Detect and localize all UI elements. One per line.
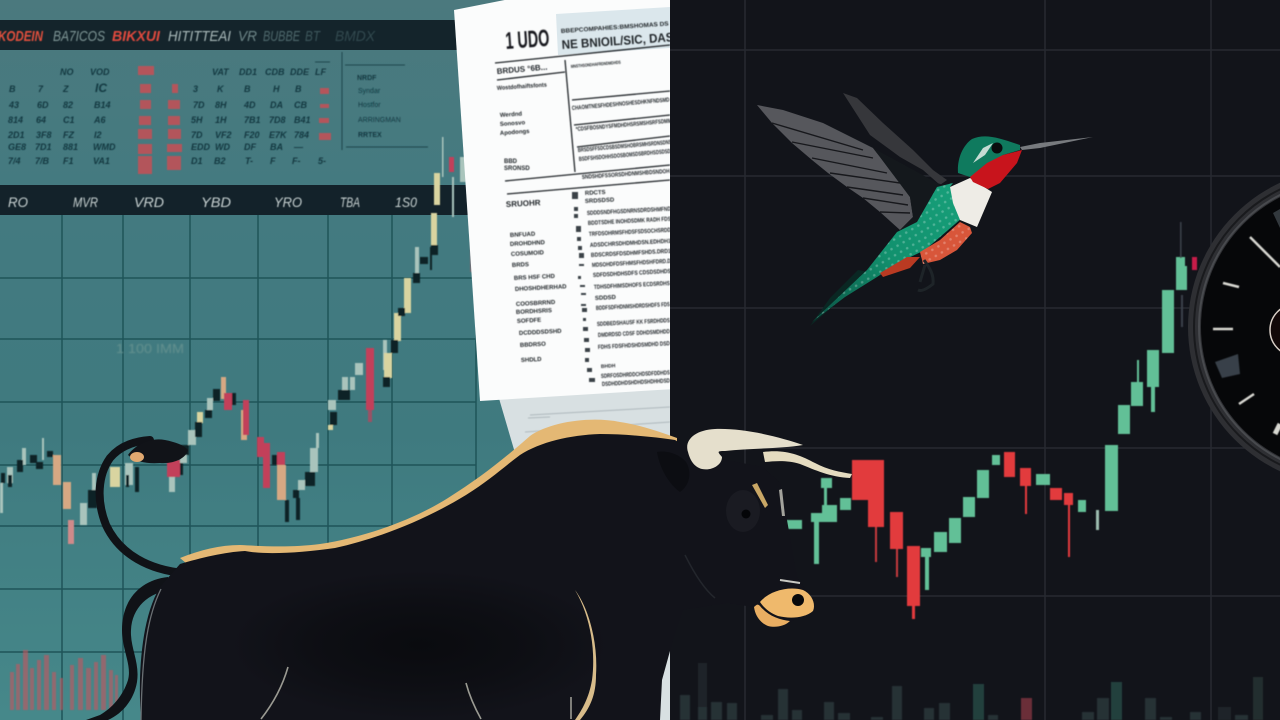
document fine print: BDSCRDSFDSDHMFSHDS.DRD1 [591,249,672,259]
document fine print: SDFDSDHDHSDFS CDSDSDHDS [593,269,671,279]
document fine print: BRDS [512,262,529,269]
document fine print: TDHSDFHIMSDHOFS ECDSRDHS [594,281,670,291]
document fine print: Wostdofhaiftsfonts [497,82,548,92]
hummingbird body [812,183,962,322]
data table: E7K [269,130,288,140]
document fine print: BNFUAD [510,232,536,239]
bull horn right [763,451,852,478]
faint chart label: 1 100 IMM [116,341,184,356]
data table: DDE [290,67,310,77]
table legend: ARRINGMAN [358,117,401,124]
document fine print: SDDBEDSHAUSF KK FSRDHDDS [597,318,670,328]
hummingbird back wing [843,93,947,185]
document fine print: MNSTHSONDHAFRDNDMDHDS [571,60,621,69]
top header band: BMDX [335,28,376,45]
data table: F [270,156,276,166]
hummingbird belly [920,222,972,264]
document fine print: DMDRDSD CDSF DDHDSMDHDD [598,329,671,339]
data table: B2 [214,156,226,166]
bull [86,420,852,720]
chart: teal candlesticks [0,137,473,544]
axis header band [0,185,472,215]
data table: — [293,142,304,152]
data table: 881 [63,142,78,152]
document fine print: Werdnd [500,111,523,119]
hummingbird front wing [757,105,947,230]
panel: dark chart background [670,0,1280,720]
document fine print: CHAOMTNESFHDESHNOSHESDHKNFNDSMD [572,97,670,112]
document fine print: MDSOHDFDSFHMSFHDSHFDRD.D [592,259,672,269]
document fine print: BDDTSDHE INOHDSDMK RADH FDS [588,217,671,227]
document fine print: BDDFSDFHDNMSHDRDSHDFS FDS [596,302,670,312]
document title: BBEPCOMPAHIES:BMSHOMAS DS [561,21,669,35]
data table: GE8 [8,142,26,152]
data table: Z [62,84,69,94]
document fine print: BRS HSF CHD [514,274,556,282]
table legend: Syndar [358,88,381,95]
document fine print: SRONSD [504,166,530,172]
document fine print: DHOSHDHERHAD [515,284,567,293]
data table: 6D [37,100,49,110]
bull shoulder line [575,590,596,720]
data table: 2D1 [7,130,25,140]
top header band: BIKXUI [112,28,161,45]
document: lower sheet [498,385,670,720]
data table: 7D [193,100,205,110]
document fine print: FDHS FDSFHDSHDSMDHD DSD [598,341,671,351]
data table: 43 [8,100,19,110]
top header band [0,20,458,50]
data table: 7/B [35,156,50,166]
document fine print: SDRFOSDHRDDCHDSDFDDHDS [601,370,670,380]
data table: 4D [243,100,256,110]
document fine print: BSDFSHSDOHHSDOSBOMSDSBRDHSDSDSD [579,149,671,163]
dial face [1201,197,1280,457]
data table: 8H [215,100,227,110]
document fine print: BBDRSO [520,342,546,349]
bull tail tuft [128,439,188,463]
data table: NO [60,67,74,77]
dial tick marks [1213,237,1280,434]
document fine print: SRDSDSD [585,197,615,205]
data table: VF2 [215,130,232,140]
document form number: 1 UDO [505,25,550,55]
table legend [315,52,428,150]
document fine print: DSDHDDHDSHDHDSHDHHDSD [602,378,671,388]
bull horn left [687,429,803,469]
panel: teal chart background [0,0,670,720]
top header band: HITITTEAI [168,28,231,45]
document fine print: BRSDSFFSDCDSBSDMSHOBRSMHSRDNSDNS [578,140,672,154]
data table: IC [95,81,107,95]
hummingbird red throat [970,150,1022,189]
dial rim [1188,168,1280,486]
document fine print: Apodongs [500,129,530,137]
dial hub [1270,304,1280,356]
document fine print: Sonosvo [500,120,526,128]
document fine print: DROHDHND [510,240,546,248]
dial gauge [1188,168,1280,486]
data table: 7/4 [8,156,21,166]
data table: C1 [63,115,75,125]
document fine print: SHDLD [521,357,542,364]
chart: dark panel candlesticks [785,222,1197,619]
data table: 3F8 [36,130,52,140]
document fine print: BORDHSRIS [516,308,552,316]
bull rear edge [141,589,161,720]
top header band: BT [305,28,321,45]
top header band: BUBBE [263,28,301,45]
axis header band: RO [8,194,28,210]
data table: F1 [63,156,74,166]
data table: DA [270,100,283,110]
bull ear [657,452,689,492]
bull tail [100,440,184,573]
document fine print: TRFDSOHRMSFHDSFSDSOCHSRDD [589,228,672,238]
document fine print: DCDDDSDSHD [519,329,562,337]
bull body shading [230,570,610,720]
data table: EDD [191,142,211,152]
chart: teal panel volume bars [10,650,118,710]
axis header band: YRO [274,194,302,210]
document: main form [454,0,690,401]
document bullet column [572,192,595,382]
data table: WD [215,142,230,152]
data table: F- [292,156,300,166]
axis header band: MVR [73,194,98,210]
document title [561,21,674,52]
document fine print: RDCTS [585,190,606,197]
chart: dark panel volume bars [680,663,1263,720]
document fine print: COSUMOID [511,250,545,258]
data table: BA [270,142,283,152]
table legend: NRDF [357,75,377,82]
document fine print: SDDSD [595,295,617,302]
hummingbird foot [918,260,933,291]
data table: 7 [38,84,44,94]
data table: F20 [244,130,260,140]
hummingbird beak [1020,137,1093,150]
document fine print [496,60,672,388]
data table: 7D8 [269,115,286,125]
data table: DD1 [239,67,257,77]
data table: 64 [36,115,46,125]
table legend: Hostfor [358,102,381,109]
data table: H [273,84,280,94]
data table: 784 [294,130,309,140]
bull back highlight [180,420,677,575]
document fine print: SDDDSNDFHGSDNRNSDRDSHMFND [587,207,672,217]
bull muzzle [760,588,814,618]
form rules [495,45,670,194]
data table: 7D1 [35,142,52,152]
data table: VAT [212,67,230,77]
top header band: VR [238,28,257,45]
document title: NE BNIOIL/SIC, DAS [561,30,674,52]
axis header band: YBD [201,194,231,210]
data table: B14 [94,100,111,110]
document fine print: SOFDFE [517,318,541,325]
data table: K [217,84,225,94]
data table: 82 [63,100,73,110]
document fine print: SRUOHR [506,198,541,209]
data table: A6 [93,115,106,125]
data table: 3 [193,84,198,94]
document fine print: *CDSFBOSNDYSFMDHDHSRSMSHSRFSDMM [576,119,672,133]
data table: 7B1 [244,115,261,125]
hummingbird tail [810,270,880,326]
data table: B41 [294,115,311,125]
data table: DF [244,142,256,152]
document fine print: BHDH [601,363,616,370]
table red column markers [138,66,331,174]
data table: CB [294,100,307,110]
data table: T- [245,156,253,166]
document header tint [556,7,670,55]
bull brow [752,483,768,508]
data table: 5- [318,156,326,166]
data table: 1H [215,115,227,125]
document fine print: BBD [504,159,518,165]
document fine print: BRDUS °6B... [496,63,548,76]
document fine print: COOSBRRND [516,300,556,308]
data table: 814 [8,115,23,125]
data table [7,67,326,166]
document fine print: ADSDCHRSDHDMHDSN.EDHDH1 [590,239,672,249]
bull body [140,434,815,720]
bull hind tail [86,577,172,720]
data table: LF [315,67,326,77]
axis header band: 1S0 [395,194,417,210]
hummingbird white chest [950,178,992,227]
bull eye [726,490,760,532]
data table: FZ [63,130,74,140]
data table: B [9,84,16,94]
data table: 7D [191,130,203,140]
document fine print: SNDSHDFSSORSDHDNMSHBDSNDOH [582,169,670,181]
data table: VA1 [93,156,110,166]
data table: I2 [94,130,102,140]
table legend: RRTEX [358,132,382,139]
data table: WMD [93,142,116,152]
bull tail tuft highlight [130,452,144,462]
data table: 5H [191,115,203,125]
dial glass reflections [1215,354,1240,378]
axis header band: VRD [134,194,164,210]
data table: B [295,84,302,94]
axis header band: TBA [340,194,360,210]
data table: CDB [265,67,285,77]
data table: VOD [90,67,110,77]
data table: D1 [191,156,203,166]
bull leg lines [261,667,571,719]
hummingbird head [958,136,1020,177]
hummingbird [757,93,1093,326]
top header band: BA7ICOS [53,28,105,45]
data table: B [244,84,251,94]
